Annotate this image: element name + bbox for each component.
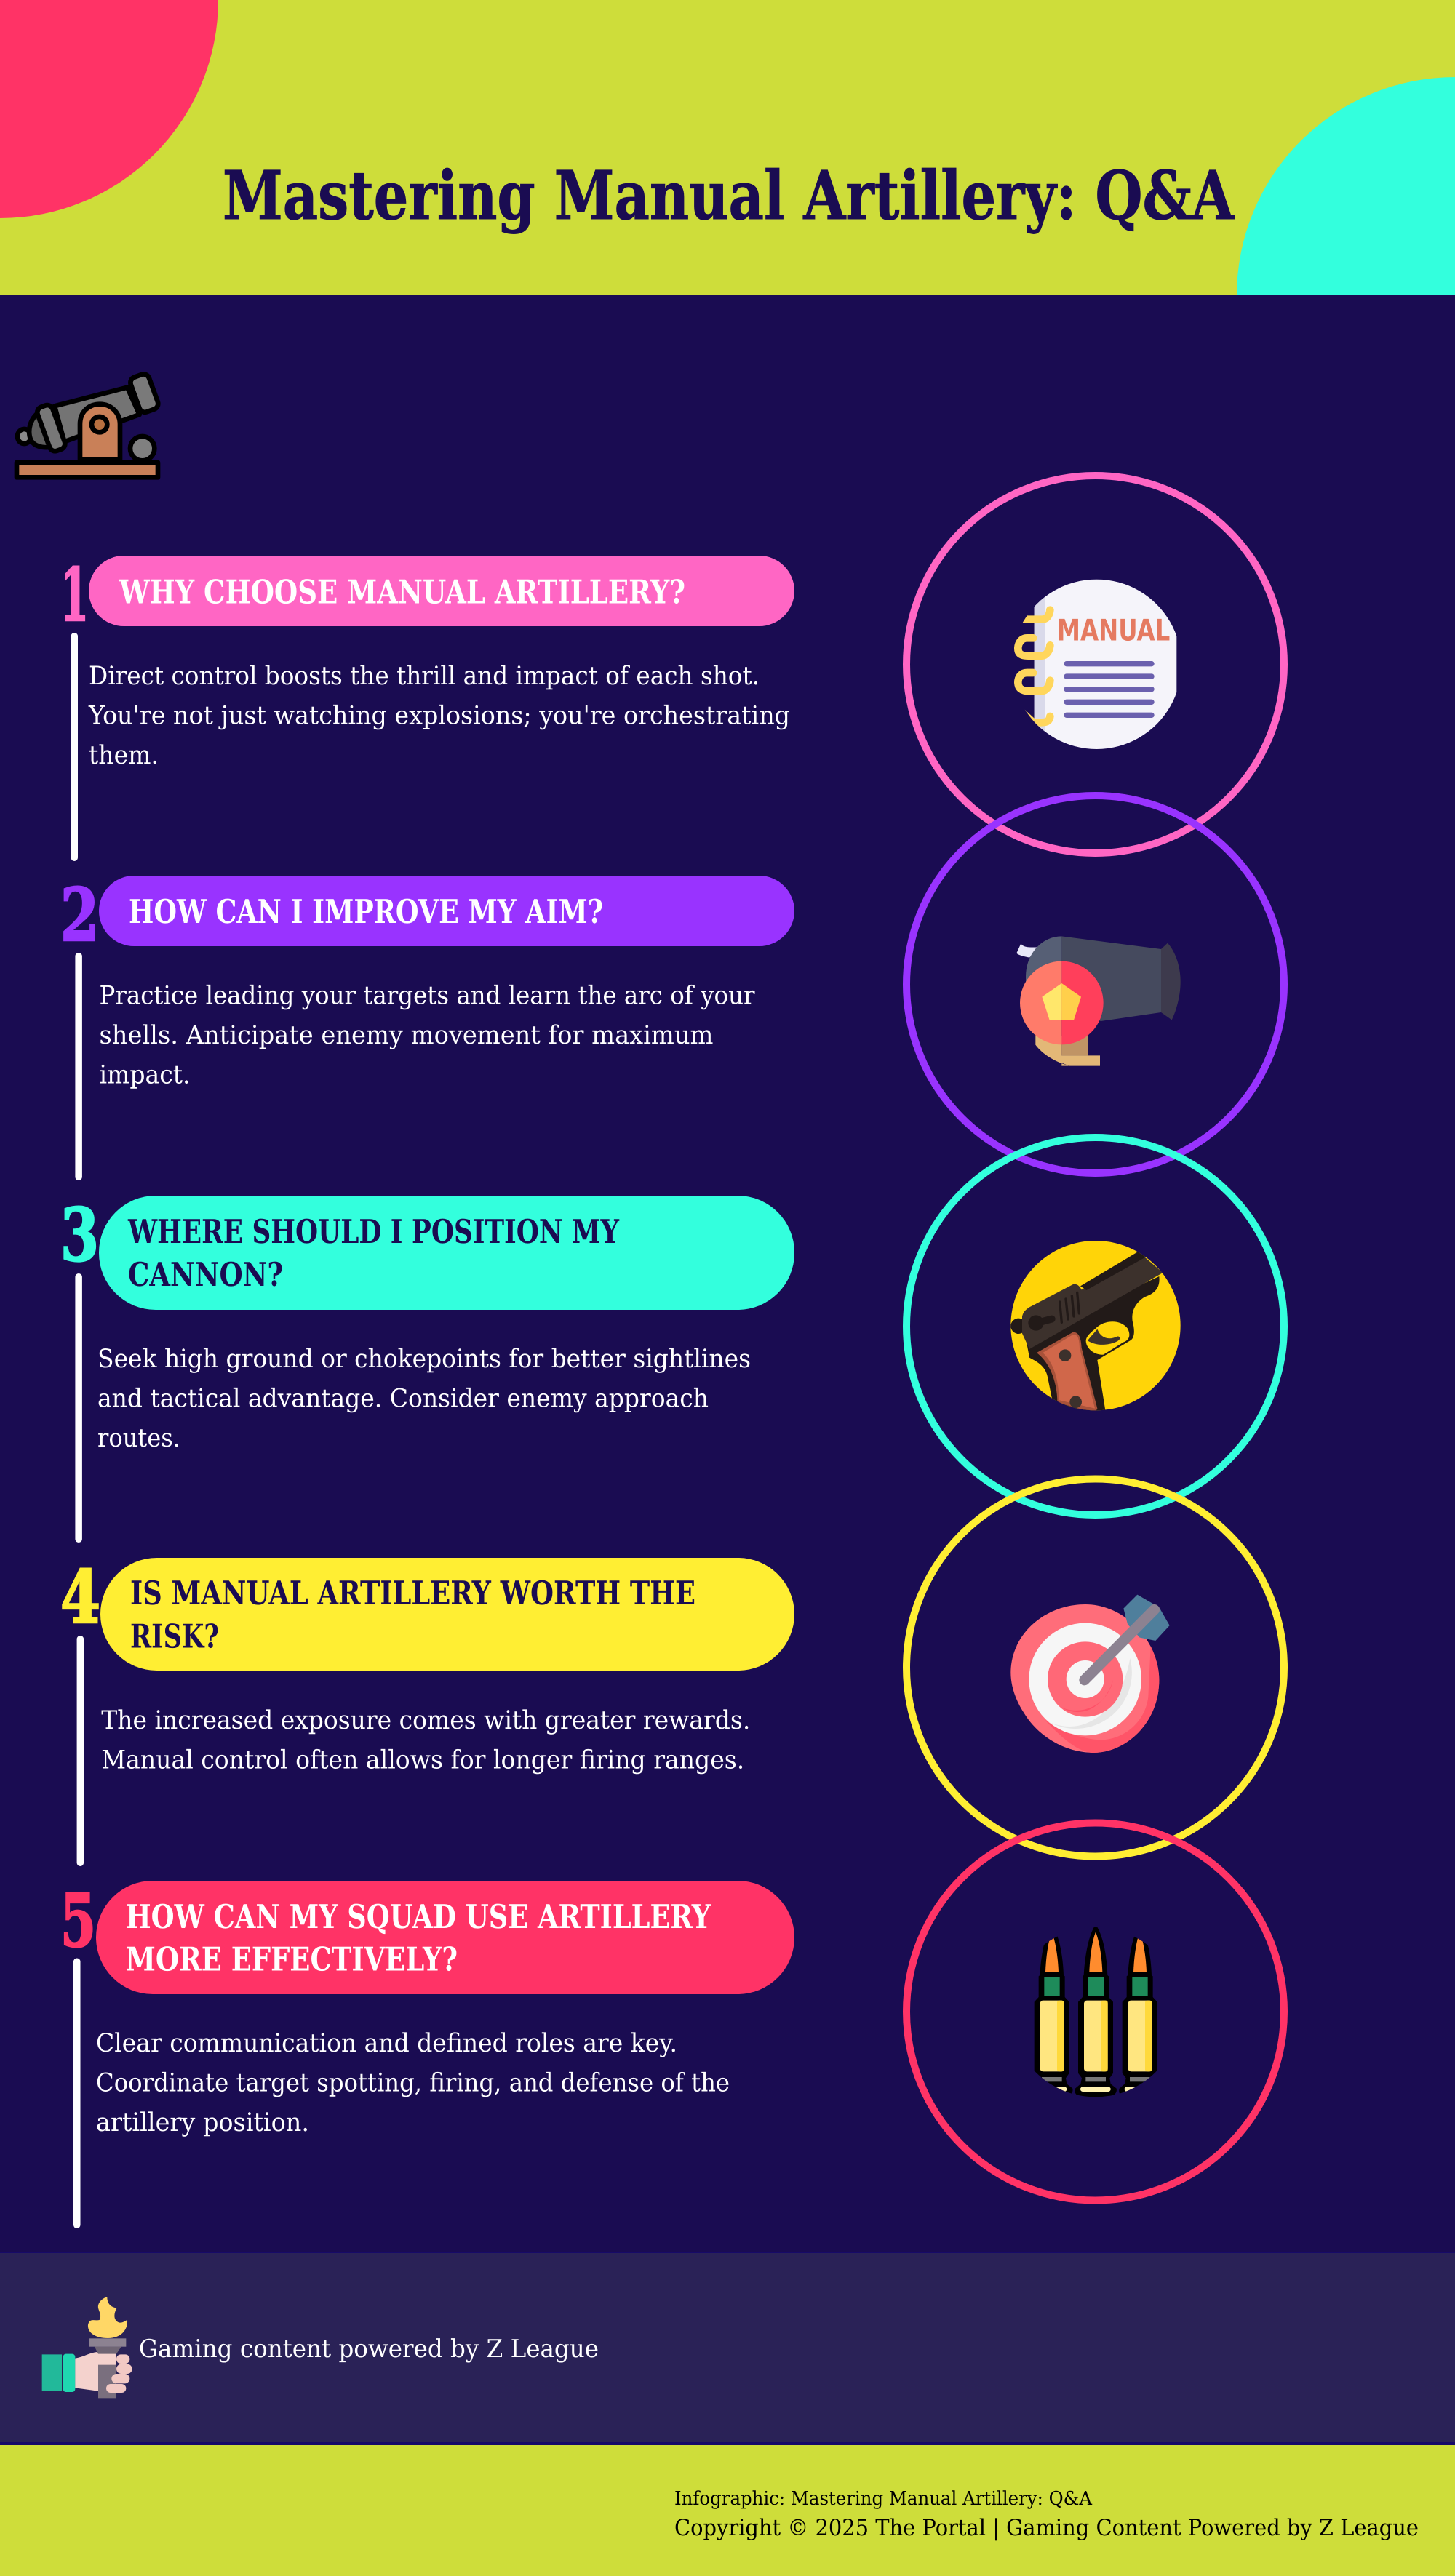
icon: target with dart: [1010, 1595, 1170, 1753]
ring 3 cyan: [906, 1137, 1284, 1515]
answer text 1: them.: [89, 741, 159, 770]
answer text 1: [88, 662, 790, 770]
number 1: 1: [60, 552, 89, 638]
panel: question 4: [60, 1554, 794, 1866]
icon: manual notebook: [1018, 577, 1176, 751]
ring 5 red: [906, 1823, 1284, 2201]
number 3: 3: [60, 1192, 99, 1278]
pill heading 2: HOW CAN I IMPROVE MY AIM?: [129, 892, 603, 931]
credit text: Gaming content powered by Z League: [139, 2335, 599, 2364]
vertical rule 3: [75, 1273, 82, 1543]
copyright footer: [0, 2445, 1455, 2576]
pill heading 5: [96, 1881, 794, 1994]
answer text 4: The increased exposure comes with greater rewards.: [101, 1706, 750, 1735]
pill heading 1: [89, 556, 794, 626]
icon: hand holding torch: [42, 2297, 132, 2398]
panel: question 2: [60, 872, 794, 1180]
panel: question 5: [60, 1878, 794, 2228]
pill heading 3: CANNON?: [128, 1255, 283, 1294]
pill heading 4: [100, 1558, 794, 1671]
answer text 2: impact.: [99, 1060, 191, 1089]
answer text 3: [97, 1345, 751, 1453]
pill heading 3: WHERE SHOULD I POSITION MY: [127, 1212, 620, 1251]
vertical rule 2: [75, 953, 82, 1180]
decorative pink corner circle: [0, 0, 218, 218]
ring 2 purple: [906, 796, 1284, 1173]
answer text 3: and tactical advantage. Consider enemy approach: [97, 1385, 709, 1414]
answer text 3: routes.: [97, 1424, 180, 1453]
answer text 4: Manual control often allows for longer firing ranges.: [101, 1745, 744, 1775]
icon: pistol: [1010, 1241, 1181, 1413]
answer text 4: [101, 1706, 750, 1775]
answer text 5: Clear communication and defined roles are key.: [96, 2029, 677, 2058]
number 5: 5: [60, 1878, 96, 1964]
infographic name: Infographic: Mastering Manual Artillery: Q&A: [674, 2488, 1093, 2510]
answer text 5: artillery position.: [96, 2108, 309, 2137]
pill heading 5: HOW CAN MY SQUAD USE ARTILLERY: [126, 1897, 711, 1936]
pill heading 2: [99, 876, 794, 946]
header banner: [0, 0, 1455, 295]
pill heading 4: IS MANUAL ARTILLERY WORTH THE: [130, 1574, 695, 1612]
manual word: MANUAL: [1057, 613, 1170, 647]
vertical rule 4: [77, 1636, 84, 1866]
answer text 3: Seek high ground or chokepoints for better sightlines: [97, 1345, 751, 1374]
answer text 2: Practice leading your targets and learn the arc of your: [99, 982, 755, 1011]
copyright line: Copyright © 2025 The Portal | Gaming Content Powered by Z League: [674, 2515, 1419, 2541]
title: Mastering Manual Artillery: Q&A: [223, 156, 1235, 235]
answer text 1: Direct control boosts the thrill and impact of each shot.: [89, 662, 760, 691]
answer text 5: Coordinate target spotting, firing, and defense of the: [96, 2068, 730, 2097]
vertical rule 1: [71, 633, 78, 861]
panel: question 1: [60, 552, 794, 861]
decorative cyan corner circle: [1237, 77, 1455, 295]
icon: cannon front: [1016, 936, 1181, 1066]
number 2: 2: [60, 872, 99, 958]
pill heading 5: MORE EFFECTIVELY?: [126, 1940, 458, 1978]
footer credit band: [0, 2252, 1455, 2446]
icon: cannon: [17, 372, 160, 477]
vertical rule 5: [73, 1958, 80, 2228]
number 4: 4: [60, 1554, 100, 1640]
panel: question 3: [60, 1192, 794, 1543]
ring 4 yellow: [906, 1479, 1284, 1856]
answer text 2: [99, 982, 755, 1089]
answer text 2: shells. Anticipate enemy movement for maximum: [99, 1021, 713, 1050]
answer text 1: You're not just watching explosions; you're orchestrating: [88, 701, 790, 730]
answer text 5: [96, 2029, 730, 2137]
pill heading 4: RISK?: [130, 1617, 219, 1655]
manual text lines: [1064, 661, 1155, 718]
pill heading 1: WHY CHOOSE MANUAL ARTILLERY?: [119, 573, 685, 611]
ring 1 pink: [906, 476, 1284, 853]
pill heading 3: [99, 1196, 794, 1310]
icon: three bullets: [1031, 1924, 1161, 2097]
